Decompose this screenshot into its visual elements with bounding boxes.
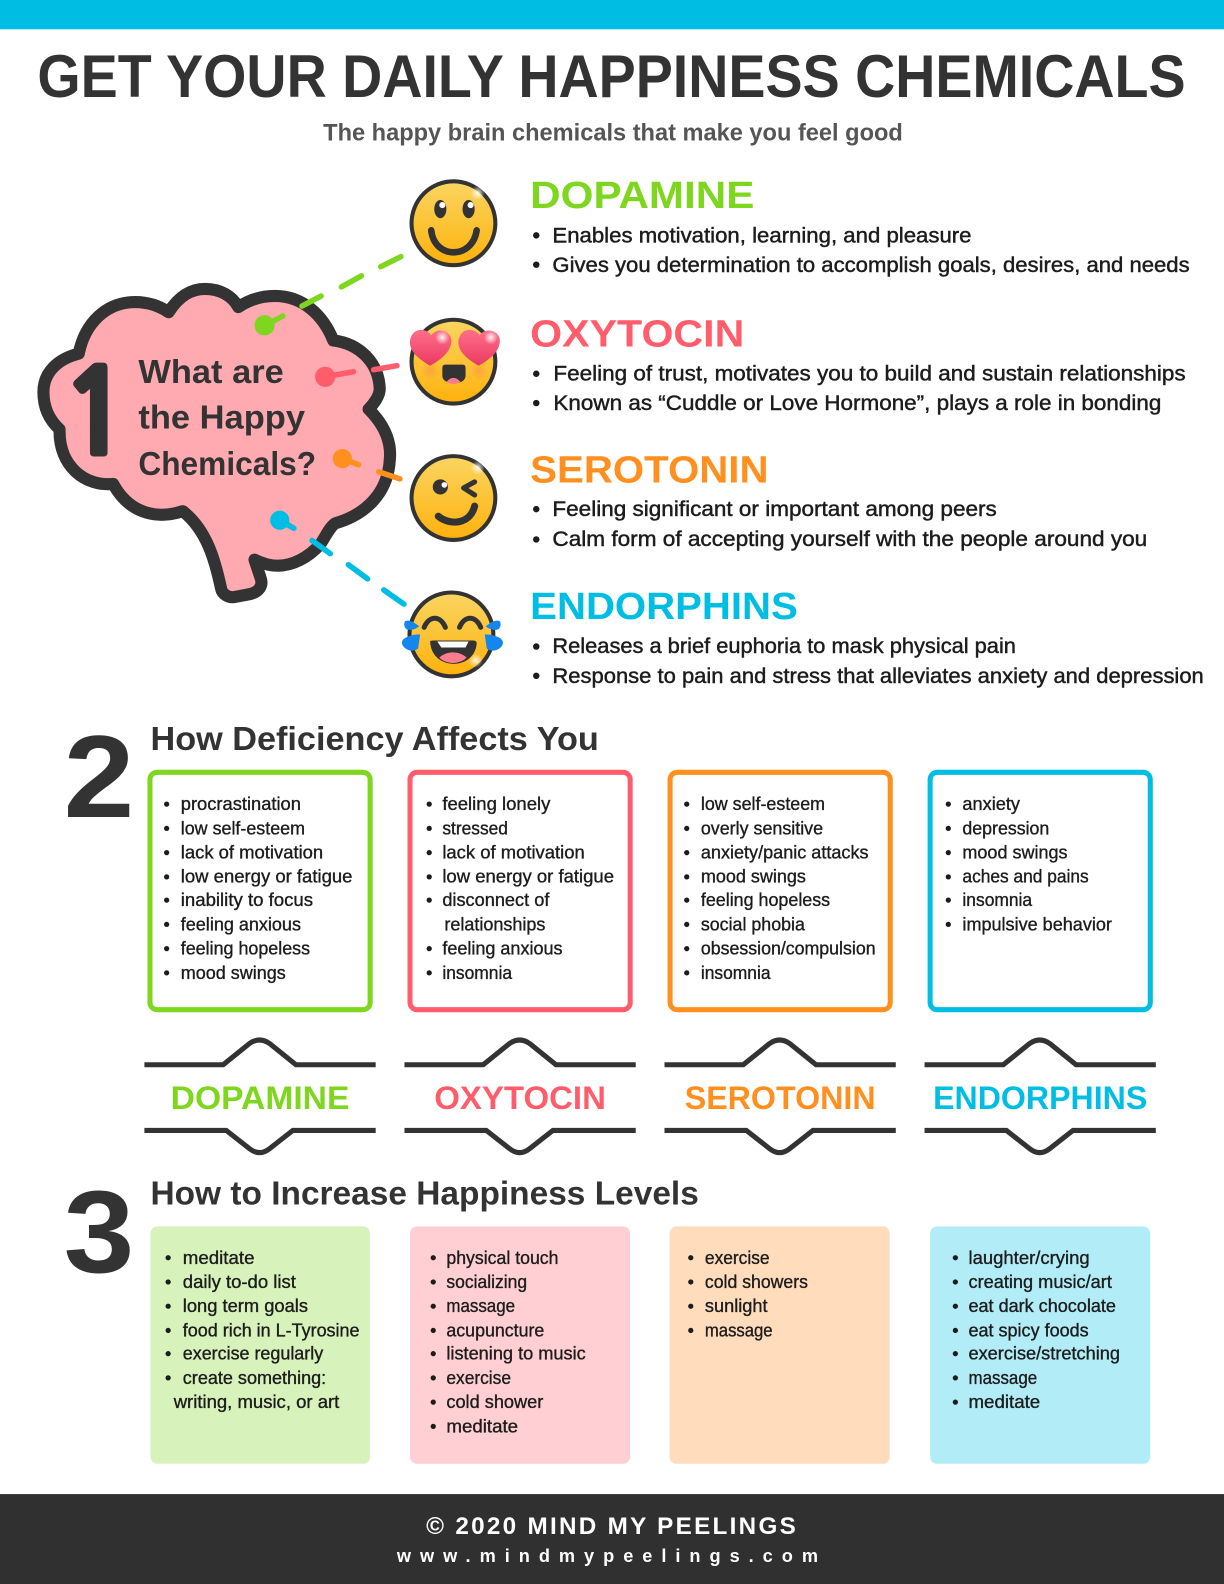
panel: oxytocin increase: cold shower — [446, 1392, 543, 1412]
section number 1: 1 — [61, 356, 132, 472]
panel: serotonin deficiency: anxiety/panic attacks — [701, 843, 869, 863]
panel: dopamine increase: meditate — [183, 1248, 254, 1268]
panel: oxytocin deficiency: stressed — [442, 818, 508, 838]
brain label: What are — [138, 354, 284, 391]
text block: oxytocin — [530, 312, 1186, 415]
text block: serotonin: Calm form of accepting yourself with the people around you — [552, 528, 1147, 551]
heading: how to increase happiness levels: How to Increase Happiness Levels — [150, 1176, 699, 1213]
panel: oxytocin increase: physical touch — [446, 1248, 558, 1268]
panel: dopamine deficiency: low self-esteem — [181, 818, 305, 838]
ribbon: endorphins: ENDORPHINS — [933, 1080, 1147, 1116]
panel: endorphins deficiency: mood swings — [962, 843, 1067, 863]
connector: serotonin — [333, 449, 400, 479]
panel: oxytocin deficiency: low energy or fatigue — [442, 866, 614, 886]
top bar — [0, 0, 1224, 29]
panel: endorphins increase: eat dark chocolate — [968, 1296, 1116, 1316]
panel: dopamine deficiency: feeling hopeless — [181, 939, 310, 959]
panel: serotonin deficiency: insomnia — [701, 963, 771, 983]
text block: endorphins — [530, 585, 1204, 688]
panel: endorphins increase: meditate — [968, 1392, 1040, 1412]
connector: oxytocin — [315, 366, 397, 387]
panel: oxytocin deficiency: feeling anxious — [442, 939, 563, 959]
panel: oxytocin deficiency: lack of motivation — [442, 843, 585, 863]
panel: serotonin deficiency: feeling hopeless — [701, 890, 830, 910]
brain label: Chemicals? — [138, 446, 316, 483]
panel: oxytocin increase: meditate — [446, 1416, 518, 1436]
panel: endorphins increase: exercise/stretching — [968, 1344, 1120, 1364]
connector: endorphins — [270, 511, 404, 604]
footer: www.mindmypeelings.com — [396, 1546, 818, 1566]
text block: dopamine: DOPAMINE — [530, 174, 754, 217]
panel: oxytocin deficiency — [410, 772, 630, 1010]
panel: oxytocin increase: acupuncture — [446, 1320, 544, 1341]
panel: oxytocin increase: listening to music — [446, 1344, 586, 1364]
panel: dopamine deficiency: inability to focus — [181, 890, 313, 910]
panel: serotonin increase — [670, 1226, 890, 1464]
panel: oxytocin increase: exercise — [446, 1368, 511, 1388]
text block: endorphins: ENDORPHINS — [530, 585, 798, 628]
panel: dopamine deficiency — [150, 772, 370, 1010]
panel: serotonin deficiency: social phobia — [701, 914, 806, 934]
panel: serotonin increase: cold showers — [705, 1272, 808, 1292]
text block: dopamine: Enables motivation, learning, and pleasure — [552, 224, 972, 247]
heading: how deficiency affects you: How Deficiency Affects You — [150, 721, 599, 758]
panel: dopamine deficiency: low energy or fatigue — [181, 866, 352, 886]
panel: dopamine increase: create something: — [183, 1368, 326, 1388]
panel: endorphins deficiency — [930, 772, 1150, 1010]
panel: oxytocin deficiency: disconnect of — [442, 890, 550, 910]
text block: oxytocin: OXYTOCIN — [530, 312, 744, 356]
panel: serotonin increase: massage — [705, 1320, 773, 1341]
text block: oxytocin: Feeling of trust, motivates you to build and sustain relationships — [553, 362, 1186, 385]
panel: oxytocin deficiency: feeling lonely — [442, 794, 551, 814]
ribbon: oxytocin — [404, 1040, 636, 1153]
panel: dopamine increase: exercise regularly — [183, 1344, 324, 1364]
ribbon: endorphins — [925, 1040, 1156, 1153]
panel: serotonin deficiency: obsession/compulsion — [701, 939, 876, 959]
panel: serotonin deficiency: overly sensitive — [701, 818, 823, 838]
icon: heart eyes face — [410, 320, 500, 404]
text block: oxytocin: Known as “Cuddle or Love Hormone”, plays a role in bonding — [553, 392, 1161, 415]
brain shape — [43, 289, 390, 597]
panel: oxytocin increase: socializing — [446, 1272, 527, 1292]
panel: serotonin deficiency: mood swings — [701, 866, 806, 886]
panel: dopamine deficiency: procrastination — [181, 794, 301, 814]
footer: © 2020 MIND MY PEELINGS — [426, 1513, 796, 1540]
connector: dopamine — [254, 257, 401, 335]
ribbon: dopamine — [144, 1040, 376, 1153]
ribbon: serotonin: SEROTONIN — [685, 1080, 876, 1116]
panel: oxytocin increase: massage — [446, 1296, 515, 1316]
text block: dopamine — [530, 174, 1190, 277]
panel: endorphins increase: creating music/art — [968, 1272, 1112, 1292]
panel: oxytocin increase — [410, 1226, 630, 1464]
panel: serotonin increase: sunlight — [705, 1296, 768, 1316]
panel: dopamine increase: food rich in L-Tyrosine — [183, 1320, 360, 1341]
text block: serotonin: SEROTONIN — [530, 448, 769, 491]
panel: endorphins increase — [930, 1226, 1150, 1464]
text block: endorphins: Response to pain and stress that alleviates anxiety and depression — [552, 665, 1204, 688]
panel: what are the happy chemicals — [43, 257, 404, 604]
text block: serotonin — [530, 448, 1147, 551]
ribbon: serotonin — [665, 1040, 896, 1153]
panel: endorphins deficiency: aches and pains — [962, 866, 1089, 886]
footer — [0, 1494, 1224, 1584]
panel: serotonin increase: exercise — [705, 1248, 770, 1268]
section number 3: 3 — [64, 1166, 134, 1297]
icon: tears of joy face — [402, 592, 503, 676]
panel: dopamine increase: daily to-do list — [183, 1272, 296, 1292]
text block: dopamine: Gives you determination to accomplish goals, desires, and needs — [552, 254, 1190, 277]
panel: endorphins deficiency: impulsive behavior — [962, 914, 1112, 934]
panel: endorphins increase: massage — [968, 1368, 1037, 1388]
panel: serotonin deficiency — [670, 772, 890, 1010]
brain label: the Happy — [138, 399, 305, 436]
panel: endorphins deficiency: anxiety — [962, 794, 1021, 814]
panel: dopamine increase: writing, music, or art — [173, 1392, 339, 1412]
panel: dopamine increase — [150, 1226, 370, 1464]
icon: winking face — [412, 456, 495, 540]
panel: oxytocin deficiency: insomnia — [442, 963, 513, 983]
panel: dopamine deficiency: feeling anxious — [181, 914, 301, 934]
section number 2: 2 — [64, 711, 134, 842]
ribbon: dopamine: DOPAMINE — [171, 1080, 349, 1116]
subtitle: The happy brain chemicals that make you feel good — [323, 119, 903, 146]
panel: dopamine increase: long term goals — [183, 1296, 308, 1316]
panel: oxytocin deficiency: relationships — [444, 914, 545, 934]
panel: endorphins increase: eat spicy foods — [968, 1320, 1089, 1341]
panel: serotonin deficiency: low self-esteem — [701, 794, 825, 814]
panel: dopamine deficiency: mood swings — [181, 963, 286, 983]
text block: endorphins: Releases a brief euphoria to mask physical pain — [552, 635, 1016, 658]
icon: smiling face — [412, 181, 495, 265]
brain label — [138, 354, 316, 483]
panel: dopamine deficiency: lack of motivation — [181, 843, 323, 863]
panel: endorphins increase: laughter/crying — [968, 1248, 1090, 1268]
text block: serotonin: Feeling significant or important among peers — [552, 498, 997, 521]
panel: endorphins deficiency: depression — [962, 818, 1049, 838]
panel: endorphins deficiency: insomnia — [962, 890, 1033, 910]
ribbon: oxytocin: OXYTOCIN — [434, 1080, 606, 1116]
